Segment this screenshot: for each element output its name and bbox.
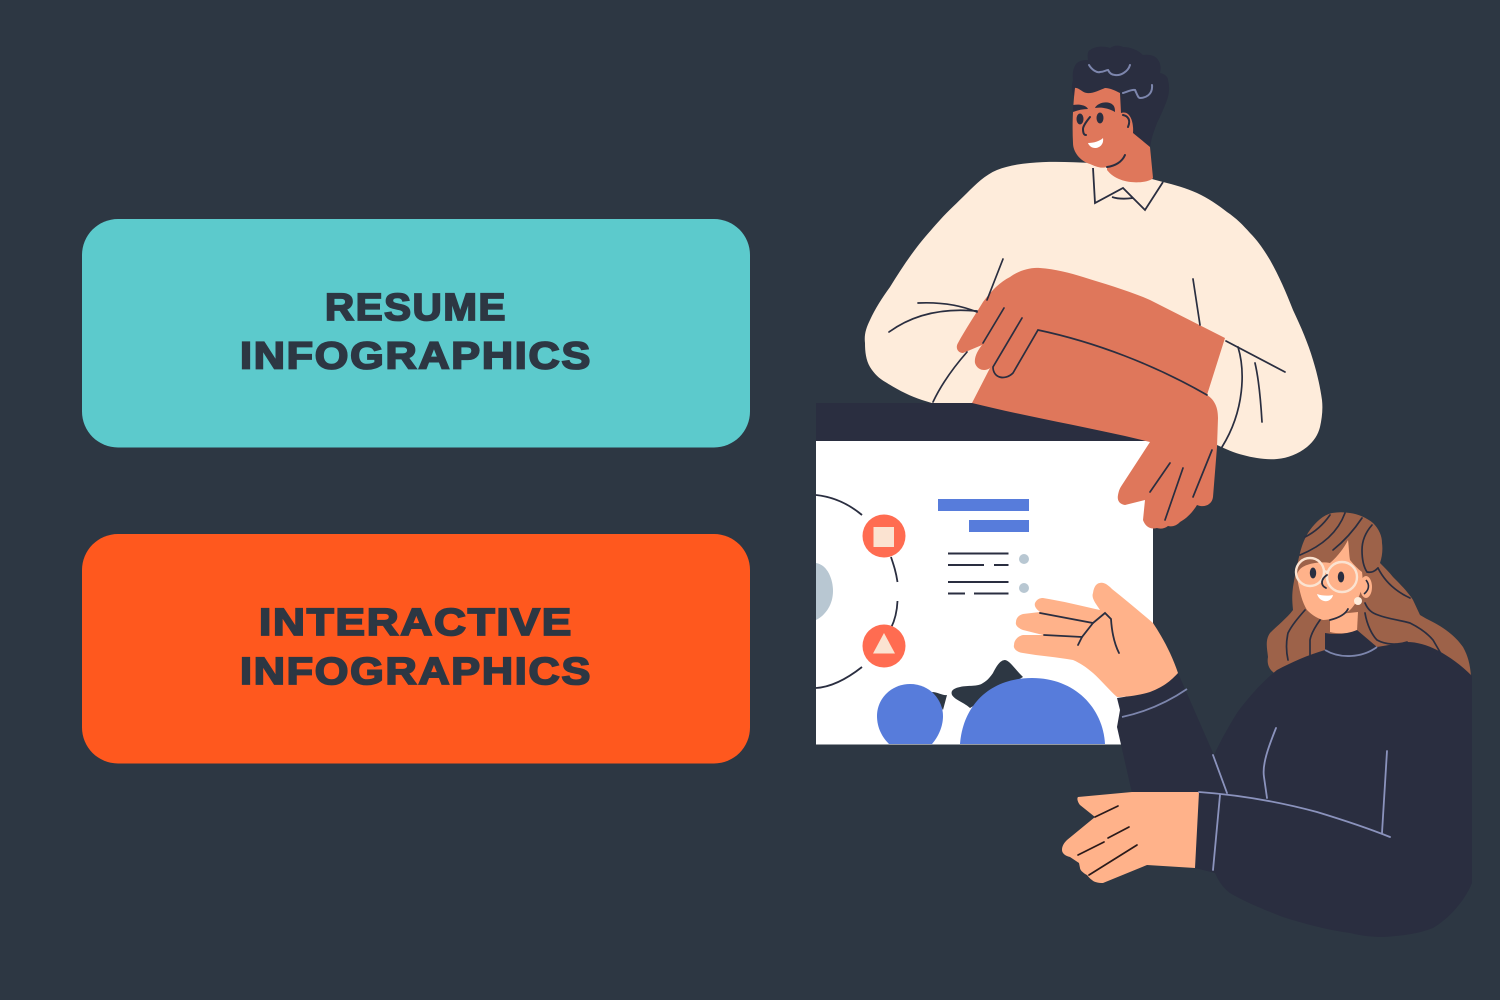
woman raised hand: [1014, 583, 1178, 697]
woman sweater lines: [1199, 728, 1390, 870]
man hair curls: [1089, 65, 1152, 98]
man eyebrows: [1073, 102, 1115, 112]
icon: square in circle: [862, 514, 906, 558]
board screen: [816, 441, 1153, 744]
heading: resume infographics: INFOGRAPHICS: [240, 336, 592, 378]
woman nose and jaw: [1322, 575, 1348, 620]
man nose, ear and jaw lines: [1083, 115, 1129, 167]
woman ear and earring: [1354, 576, 1372, 605]
heading: resume infographics: RESUME: [325, 287, 507, 329]
woman neck and collar: [1325, 612, 1377, 657]
board blue bars: [938, 499, 1029, 532]
illustration: man leaning on board: [816, 46, 1472, 937]
man smile: [1088, 138, 1103, 148]
woman lower hand: [1062, 792, 1199, 883]
board orbit lines: [816, 495, 898, 688]
panel: resume infographics: [82, 219, 750, 448]
woman torso: [1195, 642, 1472, 937]
board text lines: [948, 554, 1008, 594]
man collar: [1093, 168, 1163, 210]
woman lower hand finger lines: [1078, 806, 1137, 875]
panel: interactive infographics: [82, 534, 750, 764]
heading: interactive infographics: [240, 602, 592, 693]
woman face: [1297, 540, 1362, 620]
icon: triangle in circle: [862, 624, 906, 668]
woman raised hand lines: [1040, 613, 1119, 653]
woman smile: [1317, 594, 1333, 601]
heading: interactive infographics: INFOGRAPHICS: [240, 651, 592, 693]
woman eyes: [1310, 568, 1344, 582]
board blue shapes: [877, 678, 1105, 744]
man torso and sleeves: [865, 162, 1322, 459]
woman sleeve cuff line: [1122, 689, 1187, 717]
board bullet dots: [1019, 554, 1029, 593]
woman hair lines: [1286, 513, 1440, 660]
man forearm and hand: [957, 268, 1225, 529]
heading: interactive infographics: INTERACTIVE: [259, 602, 573, 644]
board grey circle: [816, 563, 833, 620]
woman upper arm: [1117, 673, 1227, 793]
man eyes: [1076, 112, 1104, 124]
heading: resume infographics: [240, 287, 592, 378]
board header: [816, 403, 1153, 441]
woman hair: [1267, 512, 1471, 690]
man arm and finger lines: [889, 259, 1285, 520]
man face and neck: [1073, 88, 1153, 182]
man hair: [1072, 46, 1169, 148]
board dark splash: [932, 660, 1023, 710]
woman glasses: [1296, 558, 1357, 592]
